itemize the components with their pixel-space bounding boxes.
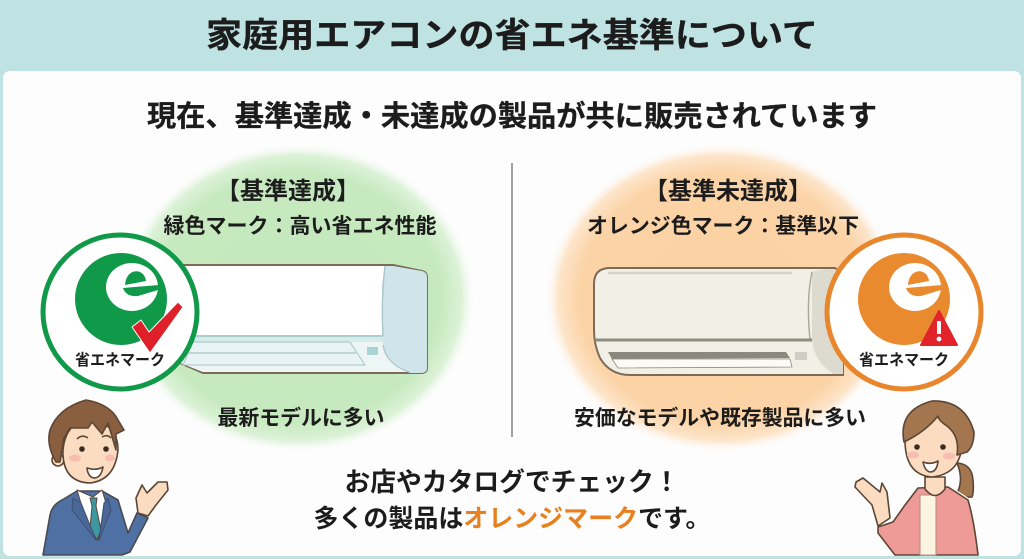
closing message: 多くの製品はオレンジマークです。 bbox=[314, 505, 710, 533]
panel: green glow bbox=[120, 143, 476, 453]
subtitle: 現在、基準達成・未達成の製品が共に販売されています bbox=[147, 99, 877, 133]
caption: green: 最新モデルに多い bbox=[218, 406, 384, 430]
caption: orange: 安価なモデルや既存製品に多い bbox=[574, 406, 866, 430]
heading: standard not met bbox=[587, 178, 859, 238]
closing message bbox=[314, 467, 710, 533]
air conditioner: beige bbox=[594, 268, 843, 375]
closing message: お店やカタログでチェック！ bbox=[344, 467, 680, 497]
divider bbox=[511, 163, 513, 437]
air conditioner: white-blue bbox=[150, 265, 427, 373]
heading: standard not met: 【基準未達成】 bbox=[644, 178, 812, 205]
letter e bbox=[106, 263, 158, 311]
illustration: woman in pink cardigan bbox=[855, 401, 978, 555]
bottom border bbox=[0, 556, 1024, 559]
letter e bbox=[889, 263, 941, 311]
icon: green e mark with check bbox=[43, 235, 197, 389]
illustration: man in suit bbox=[43, 400, 168, 555]
green mark description: 緑色マーク：高い省エネ性能 bbox=[164, 215, 436, 238]
heading: standard met bbox=[164, 178, 436, 238]
heading: standard met: 【基準達成】 bbox=[216, 178, 360, 205]
panel: orange glow bbox=[544, 143, 900, 453]
icon: orange e mark with warning bbox=[827, 235, 981, 389]
orange mark description: オレンジ色マーク：基準以下 bbox=[587, 215, 859, 238]
red warning triangle bbox=[921, 311, 957, 345]
title: 家庭用エアコンの省エネ基準について bbox=[206, 17, 818, 55]
label: 省エネマーク bbox=[75, 351, 165, 369]
red check bbox=[132, 302, 183, 353]
label: 省エネマーク bbox=[859, 351, 949, 369]
